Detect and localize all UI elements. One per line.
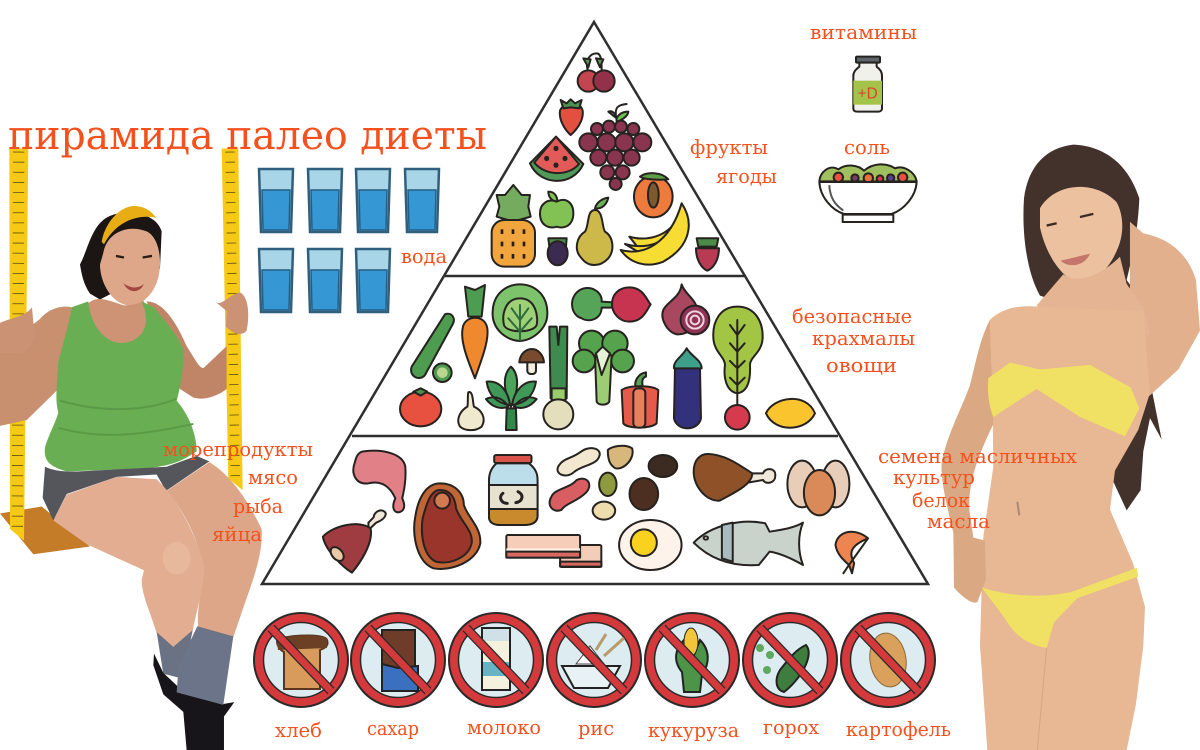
icon: fried egg [619, 520, 682, 570]
icon: bowl of salad [819, 164, 917, 222]
icon: garlic [458, 392, 484, 430]
labels: top right: соль [844, 135, 890, 159]
icon: banana [621, 203, 689, 265]
icon: steak [414, 483, 480, 569]
icon: nuts and seeds [550, 446, 677, 520]
labels: top right: витамины [810, 20, 917, 44]
pyramid bottom tier: protein foods [323, 446, 868, 573]
labels: prohibited foods: кукуруза [648, 718, 739, 742]
labels: top right: ягоды [716, 164, 777, 188]
label: water: вода [401, 244, 447, 268]
labels: prohibited foods: хлеб [275, 718, 322, 742]
labels: protein foods: рыба [233, 494, 283, 518]
icon: lettuce [493, 284, 547, 341]
labels: prohibited foods: горох [763, 715, 820, 739]
labels: fats and protein [878, 444, 1078, 533]
icon: raspberry [696, 238, 719, 271]
pyramid middle tier: vegetables [400, 284, 815, 430]
icon: beet [572, 287, 651, 322]
icon: bell pepper [622, 372, 658, 428]
icon: leek onion [543, 327, 573, 429]
icon: no rice [547, 613, 641, 707]
icon: no milk [449, 613, 543, 707]
labels: fats and protein: семена масличных [878, 444, 1078, 468]
icon: vitamin bottle [853, 57, 882, 112]
icon: cucumber [411, 314, 454, 382]
icon: no peas [743, 613, 837, 707]
icon: blackberry [548, 238, 568, 265]
icon: herb [486, 367, 537, 430]
icon: mushroom [519, 349, 544, 374]
labels: prohibited foods: сахар [367, 716, 419, 740]
icon: bacon [506, 535, 601, 567]
prohibited foods row [254, 613, 935, 707]
labels: vegetables tier [792, 304, 915, 377]
labels: protein foods: мясо [248, 465, 298, 489]
labels: prohibited foods: картофель [846, 717, 951, 741]
illustration: slim woman in yellow bikini [941, 145, 1200, 750]
icon: no corn [645, 613, 739, 707]
icon: carrot [462, 285, 488, 378]
icon: nut butter jar [489, 455, 538, 525]
icon: pear [577, 198, 612, 265]
labels: protein foods [163, 437, 313, 546]
icon: pineapple [492, 185, 535, 267]
icon: apple [540, 192, 573, 227]
icons: glasses of water [259, 169, 439, 312]
labels: fats and protein: культур [893, 465, 975, 489]
labels: prohibited foods: рис [578, 716, 614, 740]
icon: cherries [578, 53, 615, 92]
icon: vitamin bottle: +D [858, 86, 878, 103]
labels: vegetables tier: овощи [826, 353, 897, 377]
icon: no bread [254, 613, 348, 707]
icon: eggs [787, 461, 849, 515]
labels: top right [690, 20, 917, 188]
labels: vegetables tier: крахмалы [812, 326, 915, 350]
icon: broccoli [573, 331, 634, 405]
labels: top right: фрукты [690, 135, 768, 159]
title: пирамида палео диеты [8, 113, 487, 159]
icon: onion [662, 284, 709, 334]
icon: lemon [766, 399, 815, 428]
icon: leaf lettuce and radish [713, 307, 763, 430]
labels: vegetables tier: безопасные [792, 304, 912, 328]
icon: drumstick [694, 454, 775, 501]
labels: fats and protein: белок [912, 488, 970, 512]
icon: shrimp [836, 532, 868, 573]
icon: grapes [579, 104, 651, 190]
icon: tomato [400, 388, 441, 426]
labels: prohibited foods: молоко [467, 715, 541, 739]
pyramid top tier: fruits and berries [492, 53, 719, 271]
icon: watermelon [530, 137, 583, 181]
icon: ham [323, 510, 386, 573]
icon: chicken thigh [353, 451, 406, 512]
icon: no chocolate [351, 613, 445, 707]
icon: strawberry [560, 99, 583, 135]
icon: fish [694, 522, 803, 565]
icon: no potato [841, 613, 935, 707]
labels: prohibited foods [275, 715, 951, 742]
labels: fats and protein: масла [927, 509, 990, 533]
labels: protein foods: яйца [212, 522, 262, 546]
icon: peach [634, 173, 673, 217]
icon: eggplant [674, 348, 702, 428]
illustration: overweight woman on tape-measure swing [0, 149, 262, 750]
pyramid outline [262, 22, 928, 584]
labels: protein foods: морепродукты [163, 437, 313, 461]
